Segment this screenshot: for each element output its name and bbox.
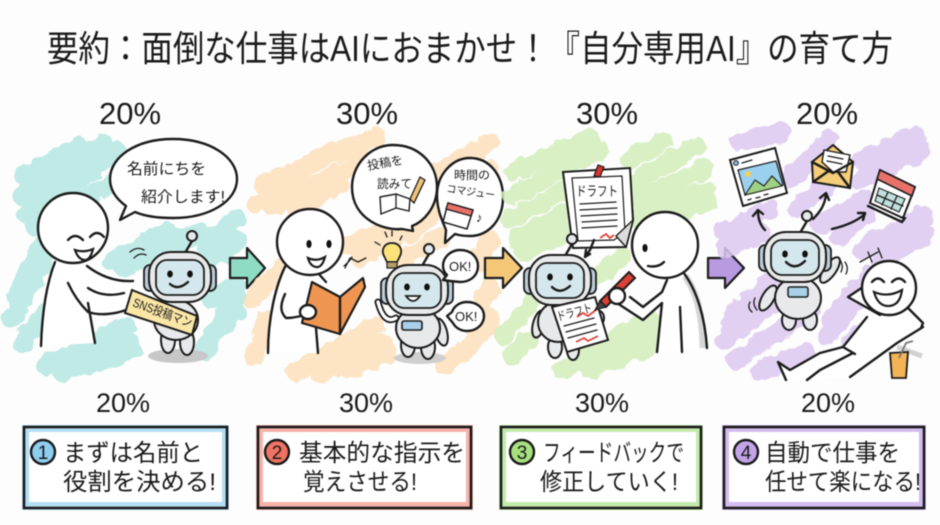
bottom percentages [96,388,855,418]
speech bubble: schedule [437,158,503,243]
envelope icon [812,145,853,188]
label box 3: green [499,425,703,510]
caption 4: 自動で仕事を [765,440,900,467]
top percentages: 20% [796,96,858,131]
figure: relaxing person [778,248,923,380]
caption 4: 任せて楽になる! [765,469,921,496]
number badge 2: 2 [272,443,282,464]
OK bubble top: OK! [449,259,471,274]
arrow: step 2 to 3 [485,248,522,288]
number badge 4: 4 [741,443,752,464]
book: orange [302,278,365,334]
robot holding nameplate [125,231,216,363]
speech bubble: name [110,139,237,220]
number badge 3: 3 [517,443,527,464]
panel: step 1 illustration [12,139,238,372]
draft document with pin [563,165,633,257]
lightbulb icon [375,231,402,268]
caption 3 [540,440,684,496]
caption 1 [63,440,216,496]
bottom percentages: 30% [575,388,629,418]
number badge 1 [31,440,55,464]
speech bubble: name: 紹介します! [141,188,225,206]
social post card icon [730,148,787,206]
small draft sheet: ドラフト [555,301,594,324]
bottom percentages: 20% [801,388,855,418]
purple scribble background [724,132,926,372]
robot with marked draft [524,234,608,360]
panel: step 3 illustration [504,138,708,370]
calendar icon [868,170,915,222]
orange scribble background [252,136,490,374]
OK bubble bottom [447,302,484,331]
speech bubble: schedule: ♪ [476,210,482,225]
red marker [595,272,635,310]
panel: step 2 illustration [252,136,503,374]
OK bubble top [443,250,478,282]
caption 1: 役割を決める! [63,469,216,496]
robot saying OK [378,244,453,364]
speech bubble: name: 名前にちを [127,160,206,178]
speech bubble: schedule: 時間の [454,169,490,182]
green scribble background [504,138,708,370]
draft document with pin: ドラフト [576,184,618,199]
number badge 4 [734,440,758,464]
label box 2: red [256,425,473,510]
task arrows [753,193,865,230]
speech bubble: read posts: 投稿を [366,152,404,173]
caption 2: 基本的な指示を [299,440,465,467]
speech bubble: read posts [352,145,437,231]
speech bubble: schedule: コマジュー [446,183,496,202]
arrow: step 1 to 2 [230,248,265,288]
robot floating [749,211,847,330]
bottom percentages: 30% [339,388,393,418]
label box 1: blue [22,425,229,510]
OK bubble bottom: OK! [455,309,477,324]
caption 2: 覚えさせる! [303,469,417,496]
top percentages [99,96,858,131]
caption 1: まずは名前と [63,440,203,467]
label box 4: purple [722,425,926,510]
speech bubble: read posts: 読みて [377,177,412,191]
figure: person reading book [268,209,366,353]
top percentages: 30% [336,96,398,131]
caption 3: フィードバックで [543,440,684,467]
number badge 3 [510,440,534,464]
number badge 2 [265,440,289,464]
figure: person with red marker [595,212,707,352]
teal scribble background [12,144,238,372]
number badge 1: 1 [38,443,48,464]
juice glass [890,341,913,378]
caption 2 [299,440,465,496]
figure: smiling person [38,193,133,346]
top percentages: 30% [576,96,638,131]
arrow: step 3 to 4 [708,248,744,288]
panel: step 4 illustration [724,132,926,380]
caption 4 [765,440,921,496]
caption 3: 修正していく! [540,469,678,496]
nameplate: SNS投稿マン: SNS投稿マン [131,295,194,330]
top percentages: 20% [99,96,161,131]
bottom percentages: 20% [96,388,150,418]
